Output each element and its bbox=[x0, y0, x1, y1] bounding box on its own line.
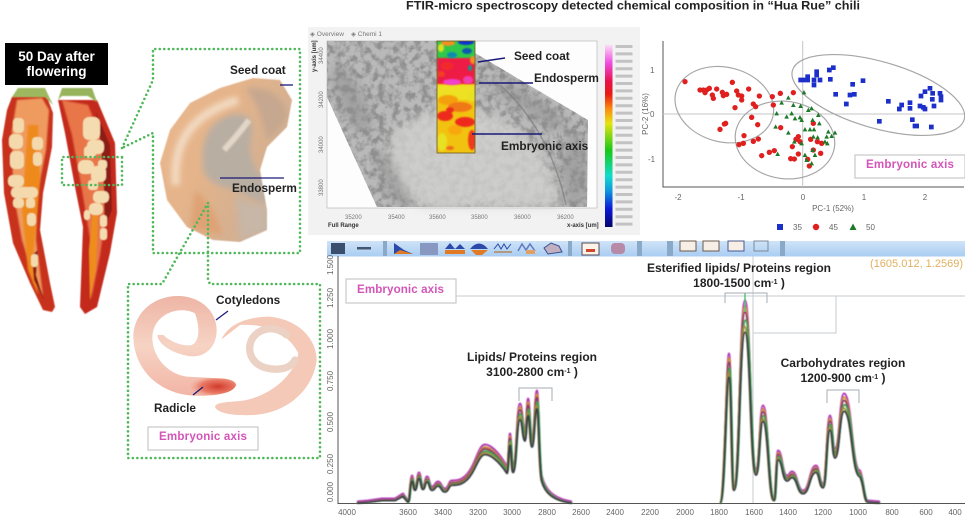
x-axis tick labels: 4000 bbox=[338, 508, 356, 517]
annotation: esterified lipids proteins region: ) bbox=[777, 276, 785, 290]
chemical heat map bbox=[437, 39, 476, 153]
illustration: embryonic axis bbox=[133, 293, 317, 450]
image axes labels: 34200 bbox=[319, 91, 325, 108]
endosperm pointer: Endosperm bbox=[534, 71, 599, 85]
y-axis tick labels: 1.250 bbox=[326, 287, 335, 308]
PCA axis labels: -2 bbox=[674, 193, 682, 202]
x-axis tick labels: 1400 bbox=[779, 508, 797, 517]
annotation: esterified lipids proteins region: Esterified lipids/ Proteins region bbox=[647, 261, 831, 275]
x-axis tick labels: 1200 bbox=[814, 508, 832, 517]
group ellipses bbox=[667, 38, 965, 185]
embryo curls bbox=[133, 296, 317, 415]
x-axis tick labels: 3000 bbox=[503, 508, 521, 517]
x-axis tick labels: 3600 bbox=[399, 508, 417, 517]
image axes labels: 36200 bbox=[557, 215, 574, 221]
x-axis tick labels: 3400 bbox=[434, 508, 452, 517]
annotation: lipids proteins region: ) bbox=[570, 365, 578, 379]
annotation: carbohydrates region: ) bbox=[878, 371, 885, 385]
x-axis tick labels: 2200 bbox=[641, 508, 659, 517]
seed coat label bbox=[230, 63, 293, 85]
radicle label bbox=[154, 387, 203, 415]
annotation: lipids proteins region: Lipids/ Proteins region bbox=[467, 350, 597, 364]
PCA axis labels: 2 bbox=[923, 193, 928, 202]
label: 50 day after flowering: flowering bbox=[26, 64, 86, 79]
embryonic axis pointer bbox=[472, 134, 589, 153]
micrograph bbox=[325, 41, 597, 216]
window tabs bbox=[310, 31, 382, 38]
spectra axes bbox=[338, 256, 965, 504]
x-axis tick labels: 2600 bbox=[572, 508, 590, 517]
cursor readout: (1605.012, 1.2569) bbox=[870, 258, 963, 270]
x-axis tick labels: 2400 bbox=[606, 508, 624, 517]
annotation: carbohydrates region: -1 bbox=[872, 374, 878, 381]
annotation: carbohydrates region bbox=[781, 356, 905, 403]
annotation: lipids proteins region bbox=[467, 350, 597, 401]
PCA axis labels: 0 bbox=[801, 193, 806, 202]
window tabs: ◈ Chemi 1 bbox=[351, 31, 382, 38]
title: FTIR-micro spectroscopy detected chemical composition in “Hua Rue” chili bbox=[406, 0, 860, 12]
series: 35 days bbox=[801, 68, 941, 127]
annotation: esterified lipids proteins region: 1800-1500 cm bbox=[693, 276, 771, 290]
PCA legend: 50 bbox=[866, 223, 875, 232]
green peak tip bbox=[744, 293, 746, 312]
heat map outline bbox=[437, 41, 475, 153]
embryonic axis tag bbox=[346, 279, 456, 303]
x-axis tick labels: 2800 bbox=[538, 508, 556, 517]
cursor crosshair lines bbox=[456, 256, 965, 503]
dotted zoom box: chili to seed bbox=[62, 49, 300, 253]
x-axis tick labels: 600 bbox=[919, 508, 933, 517]
image axes labels: 35600 bbox=[429, 215, 446, 221]
PCA axis labels: 1 bbox=[862, 193, 867, 202]
endosperm pointer bbox=[479, 71, 599, 85]
x-axis tick labels: 1000 bbox=[849, 508, 867, 517]
annotation: carbohydrates region: Carbohydrates region bbox=[781, 356, 905, 370]
y-axis tick labels: 1.500 bbox=[326, 254, 335, 275]
series: 45 days bbox=[685, 82, 822, 166]
PCA axis labels bbox=[641, 66, 928, 213]
annotation: esterified lipids proteins region: -1 bbox=[771, 279, 778, 286]
image axes labels: 35200 bbox=[345, 215, 362, 221]
panel: chemical image window bbox=[308, 27, 640, 235]
PCA axis labels: PC-2 (16%) bbox=[641, 93, 650, 135]
seed body bbox=[160, 78, 292, 242]
illustration: halved chili fruits bbox=[2, 88, 117, 314]
PCA legend bbox=[777, 223, 875, 232]
x-axis tick labels: 400 bbox=[948, 508, 962, 517]
embryonic axis tag bbox=[855, 155, 965, 178]
PCA axis labels: PC-1 (52%) bbox=[812, 204, 854, 213]
seed coat pointer: Seed coat bbox=[514, 49, 570, 63]
image axes labels: Full Range bbox=[328, 223, 359, 229]
image axes labels: 36000 bbox=[514, 215, 531, 221]
y-axis tick labels: 0.750 bbox=[326, 370, 335, 391]
endosperm label bbox=[220, 178, 297, 195]
y-axis tick labels: 1.000 bbox=[326, 328, 335, 349]
x-axis tick labels: 1800 bbox=[710, 508, 728, 517]
spectra traces bbox=[356, 300, 880, 503]
PCA axis labels: -1 bbox=[737, 193, 745, 202]
image axes labels: 34400 bbox=[319, 47, 325, 64]
chart: PCA scatter plot bbox=[641, 38, 965, 232]
panel: FTIR spectra window bbox=[326, 241, 965, 517]
toolbar bbox=[327, 241, 965, 256]
x-axis tick labels bbox=[338, 508, 962, 517]
image axes labels: 35400 bbox=[388, 215, 405, 221]
annotation: carbohydrates region: 1200-900 cm bbox=[801, 371, 872, 385]
label: 50 day after flowering bbox=[5, 43, 108, 85]
series: 50 days bbox=[773, 90, 837, 165]
radicle label: Radicle bbox=[154, 401, 196, 415]
annotation: esterified lipids proteins region bbox=[647, 261, 831, 303]
x-axis tick labels: 3200 bbox=[469, 508, 487, 517]
PCA axes bbox=[663, 41, 964, 187]
PCA legend: 35 bbox=[793, 223, 802, 232]
image axes labels: x-axis [um] bbox=[567, 223, 599, 229]
y-axis tick labels bbox=[326, 254, 335, 502]
cotyledons label: Cotyledons bbox=[216, 293, 281, 307]
y-axis tick labels: 0.000 bbox=[326, 481, 335, 502]
image axes labels: y-axis [um] bbox=[312, 40, 318, 72]
embryonic axis tag: Embryonic axis bbox=[357, 283, 444, 296]
x-axis tick labels: 2000 bbox=[676, 508, 694, 517]
x-axis tick labels: 1600 bbox=[745, 508, 763, 517]
colour scale bbox=[605, 45, 624, 228]
PCA axis labels: 1 bbox=[650, 66, 655, 75]
annotation: lipids proteins region: -1 bbox=[564, 368, 571, 375]
image axes labels bbox=[312, 40, 599, 229]
PCA data bbox=[667, 38, 965, 185]
embryonic axis tag bbox=[148, 427, 258, 450]
x-axis tick labels: 800 bbox=[885, 508, 899, 517]
illustration: seed section bbox=[160, 63, 297, 242]
endosperm label: Endosperm bbox=[232, 181, 297, 195]
y-axis tick labels: 0.500 bbox=[326, 411, 335, 432]
right chili half bbox=[58, 88, 117, 314]
left chili half bbox=[2, 88, 55, 312]
seed coat pointer bbox=[478, 49, 570, 63]
image axes labels: 33800 bbox=[319, 179, 325, 196]
dotted zoom box: seed to embryo bbox=[128, 203, 320, 458]
annotation: lipids proteins region: 3100-2800 cm bbox=[486, 365, 564, 379]
PCA axis labels: -1 bbox=[648, 155, 656, 164]
toolbar icons bbox=[331, 241, 768, 255]
PCA axis labels: 0 bbox=[650, 110, 655, 119]
image axes labels: 34000 bbox=[319, 136, 325, 153]
seed coat label: Seed coat bbox=[230, 63, 286, 77]
embryonic axis pointer: Embryonic axis bbox=[501, 139, 589, 153]
image axes labels: 35800 bbox=[471, 215, 488, 221]
embryonic axis tag: Embryonic axis bbox=[159, 430, 247, 443]
label: 50 day after flowering: 50 Day after bbox=[18, 49, 96, 64]
PCA legend: 45 bbox=[829, 223, 838, 232]
cotyledons label bbox=[216, 293, 281, 320]
window tabs: ◈ Overview bbox=[310, 31, 344, 38]
y-axis tick labels: 0.250 bbox=[326, 453, 335, 474]
embryonic axis tag: Embryonic axis bbox=[866, 158, 954, 171]
